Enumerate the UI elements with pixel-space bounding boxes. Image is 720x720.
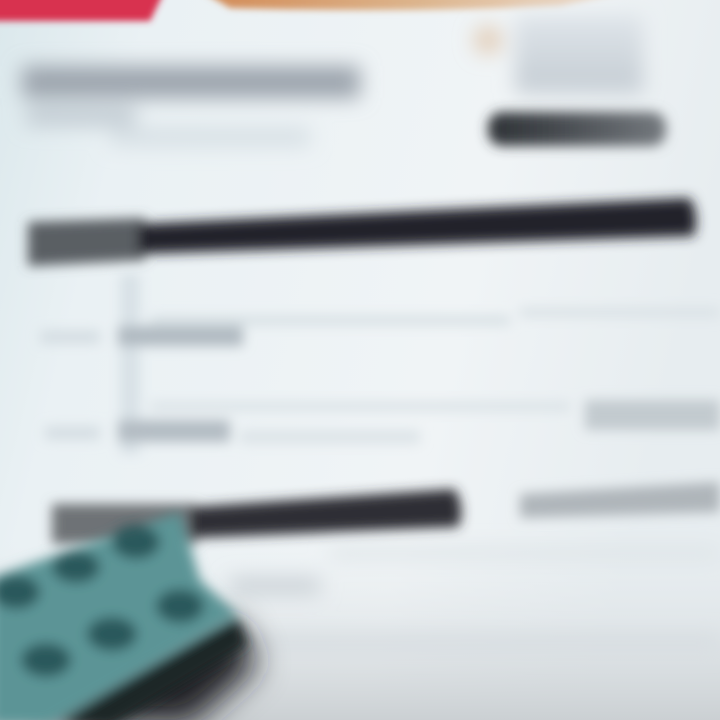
table rows xyxy=(40,274,720,454)
orange bar xyxy=(200,0,635,10)
red bar xyxy=(0,0,165,21)
heading xyxy=(22,66,360,146)
blister holes xyxy=(0,525,204,677)
dark pill label xyxy=(488,112,666,146)
right grey band xyxy=(520,482,720,518)
second dark band xyxy=(52,489,461,544)
blister pack shadow xyxy=(30,620,258,720)
lower rows xyxy=(230,548,720,650)
table header band xyxy=(28,198,696,266)
icon: teal blister pack xyxy=(0,512,248,720)
top-right grey block xyxy=(474,15,643,93)
